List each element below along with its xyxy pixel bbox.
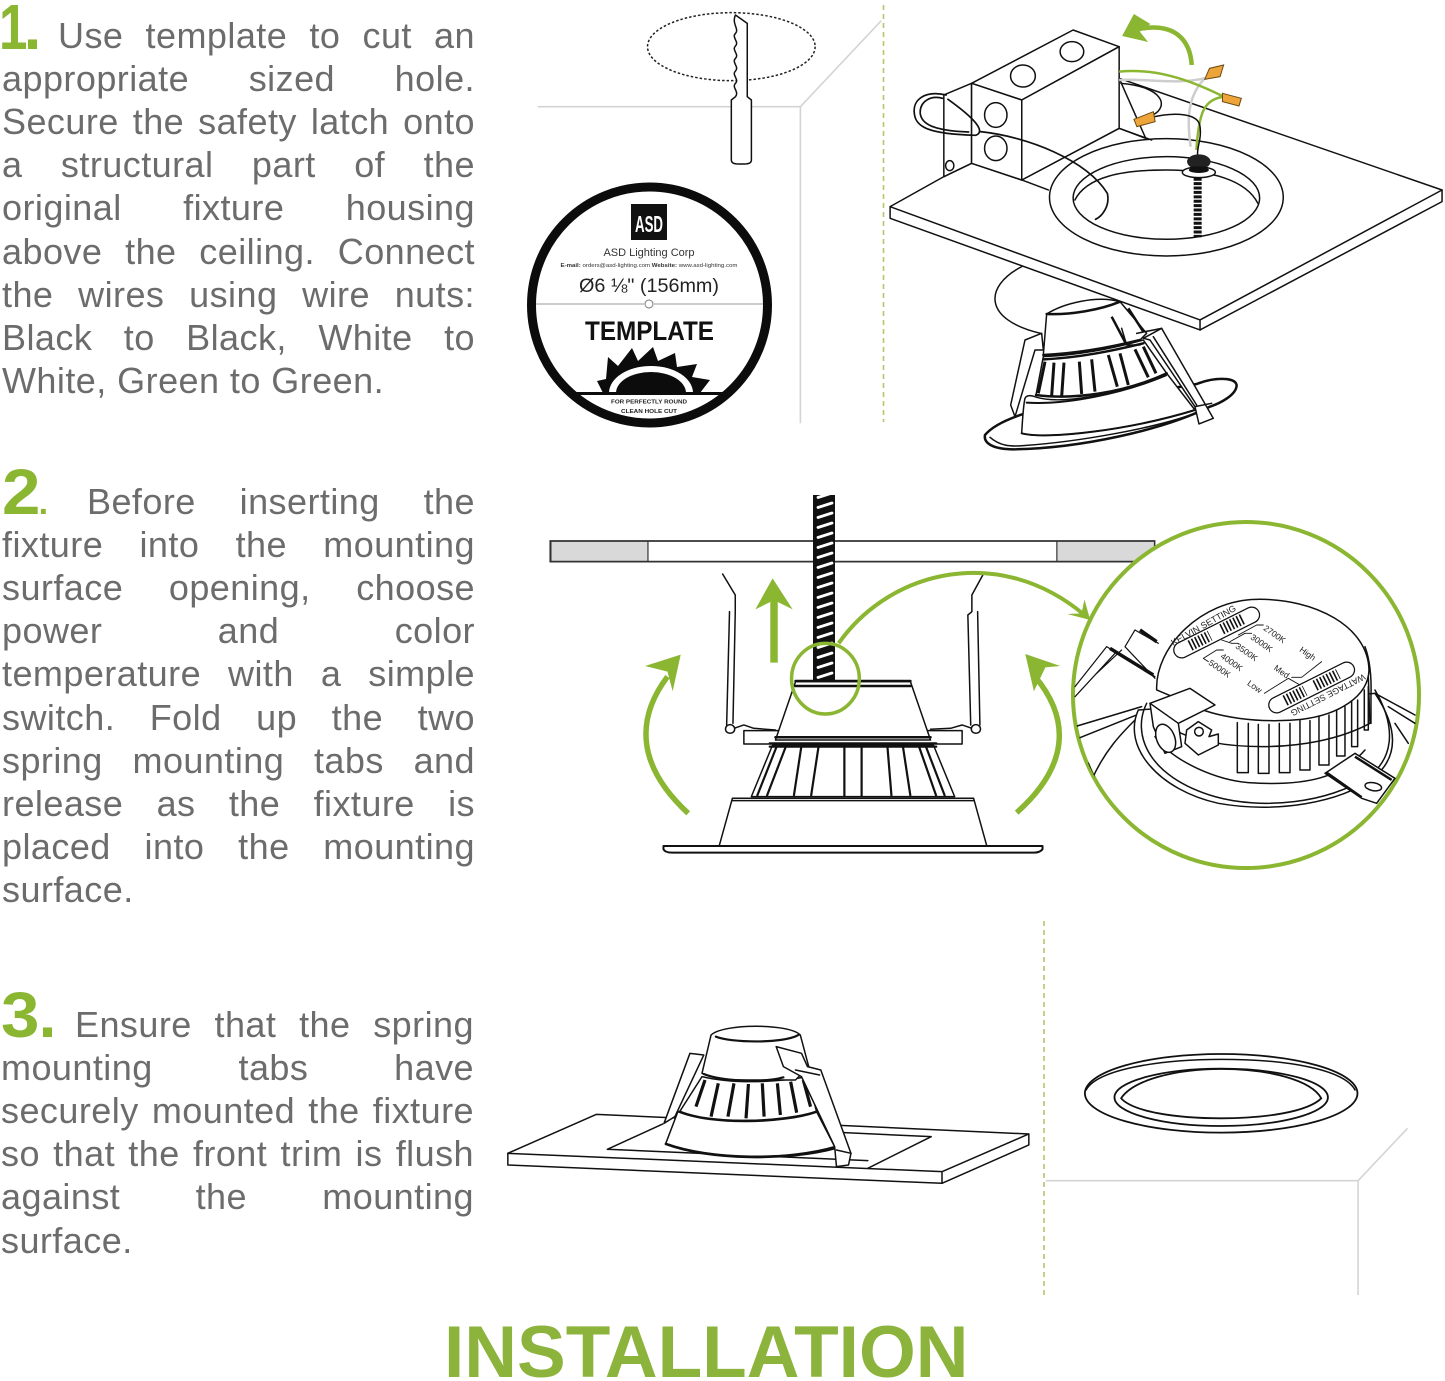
step 1 instructions: White, Green to Green.	[2, 360, 384, 401]
green curved arrow right	[1017, 654, 1060, 813]
step 2 instructions: fixture into the mounting	[2, 524, 475, 565]
wire nut left	[1134, 112, 1155, 127]
label: Med: Med	[1272, 663, 1292, 681]
wattage switch	[1277, 670, 1347, 705]
keyhole saw	[731, 15, 751, 164]
step 1: cutting hole with saw	[538, 13, 881, 423]
green up arrow	[755, 578, 793, 663]
connector hole	[1154, 724, 1176, 754]
detail fixture drawing	[1075, 599, 1415, 807]
step 1 instructions: a structural part of the	[2, 144, 475, 185]
step 1: fixture below board	[985, 299, 1237, 449]
mounting board	[890, 78, 1442, 330]
step 2 instructions: placed into the mounting	[2, 826, 475, 867]
spring arm right	[931, 574, 983, 729]
step 3 instructions: surface.	[1, 1220, 133, 1260]
step number 1	[0, 0, 41, 63]
step 3: fixture in board	[508, 1026, 1029, 1183]
connector block	[1150, 688, 1215, 753]
center line	[536, 303, 763, 305]
step 2 instructions	[2, 456, 475, 910]
kelvin switch	[1182, 615, 1252, 650]
upper cup	[775, 682, 931, 740]
threaded rod	[1194, 173, 1202, 237]
ceiling corner lines	[1046, 1128, 1408, 1295]
step 3: ceiling corner and finished trim	[1046, 1054, 1408, 1295]
step 1 instructions: Secure the safety latch onto	[2, 101, 475, 142]
step number 2: .	[39, 484, 48, 522]
spring clip	[1112, 308, 1143, 345]
step 2: fixture front view	[645, 573, 1090, 853]
trim inner line	[990, 414, 1193, 446]
step number 2: 2	[2, 456, 40, 528]
trim ring	[985, 379, 1237, 449]
step 2: zoomed detail circle	[1073, 522, 1419, 868]
lower cone	[1022, 373, 1195, 435]
rod nut	[1182, 154, 1215, 178]
label: 3500K: 3500K	[1234, 641, 1260, 663]
step 2 instructions: surface opening, choose	[2, 567, 475, 608]
dotted divider 1	[882, 5, 884, 422]
latch cable below	[995, 267, 1041, 333]
green zoom arc	[839, 573, 1090, 643]
detail circle background	[1073, 522, 1419, 868]
fins	[1168, 677, 1370, 773]
board	[508, 1114, 1029, 1183]
step 3 instructions	[1, 979, 474, 1260]
label: 3000K: 3000K	[1249, 632, 1275, 654]
wire: gray	[1119, 78, 1205, 147]
step 1 instructions: appropriate sized hole.	[2, 58, 475, 99]
step 2 instructions: spring mounting tabs and	[2, 740, 475, 781]
sticker ring	[532, 187, 768, 423]
ASD logo	[631, 204, 667, 240]
green highlight ellipse	[792, 643, 859, 714]
sticker caption line 2: CLEAN HOLE CUT	[621, 409, 677, 415]
step 3 instructions: mounting tabs have	[1, 1047, 474, 1088]
label: High: High	[1298, 644, 1318, 663]
ASD logo: ASD	[635, 211, 663, 237]
spring tab right	[1143, 328, 1213, 424]
template sticker	[532, 187, 768, 423]
switch leader lines	[1203, 625, 1322, 693]
flexible conduit	[813, 495, 835, 683]
step 2 instructions: surface.	[2, 869, 134, 910]
contact line: E-mail: orders@asd-lighting.com Website: www.asd-lighting.com	[560, 263, 738, 269]
connector nut	[1185, 722, 1218, 755]
fixture fins	[680, 1077, 817, 1121]
step 1 instructions: Use template to cut an	[58, 14, 475, 56]
spring arm left hinge	[725, 725, 735, 733]
trim	[663, 846, 1043, 853]
right tab	[1325, 753, 1395, 803]
step number 3	[1, 979, 56, 1051]
sticker caption line 1: FOR PERFECTLY ROUND	[611, 400, 687, 406]
step 2 instructions: power and color	[2, 610, 475, 651]
trim ring	[1085, 1054, 1357, 1133]
step 1 instructions: above the ceiling. Connect	[2, 230, 475, 272]
step 1 instructions: original fixture housing	[2, 187, 475, 228]
step 2 instructions: switch. Fold up the two	[2, 696, 475, 738]
fin base ring	[1155, 737, 1365, 783]
step 2 instructions: release as the fixture is	[2, 783, 475, 824]
wire nut right	[1222, 93, 1241, 106]
safety latch	[914, 94, 1108, 219]
bracket clips	[1075, 630, 1158, 697]
heat fins	[1036, 340, 1167, 397]
step 1 instructions	[0, 0, 475, 401]
fixture upper cup	[702, 1026, 809, 1080]
wire nut top	[1205, 65, 1224, 79]
upper cup	[1043, 299, 1147, 355]
spring arm left	[723, 574, 775, 730]
green curved arrow left	[645, 655, 688, 813]
step 2 instructions: temperature with a simple	[2, 653, 475, 694]
company name: ASD Lighting Corp	[603, 247, 695, 259]
inline illustrations	[507, 5, 1443, 1295]
center mark	[645, 300, 653, 308]
label: kelvin setting: KELVIN SETTING	[1169, 603, 1238, 648]
board left grey section	[551, 541, 648, 561]
board opening	[607, 1124, 931, 1168]
saw blade icon	[597, 347, 710, 392]
label: 5000K: 5000K	[1207, 657, 1233, 680]
control head top	[1157, 599, 1369, 721]
wire: green	[1119, 71, 1224, 150]
ceiling corner lines	[538, 21, 881, 423]
label: 2700K: 2700K	[1262, 623, 1288, 645]
junction box	[944, 30, 1152, 190]
lower cone	[719, 798, 987, 846]
step 1 instructions: the wires using wire nuts:	[2, 274, 475, 315]
step 3 instructions: Ensure that the spring	[75, 1004, 474, 1044]
outer trim rings	[1134, 693, 1393, 807]
board hole	[1049, 139, 1283, 256]
background trim curves	[1076, 692, 1416, 779]
step number 3: .	[39, 979, 56, 1051]
step 2: ceiling board section	[550, 541, 1155, 562]
fixture lower cone	[666, 1112, 835, 1156]
template label: TEMPLATE	[585, 316, 714, 346]
board right grey section	[1057, 541, 1155, 561]
step 1 instructions: Black to Black, White to	[2, 317, 475, 358]
step 2 instructions: Before inserting the	[87, 480, 475, 522]
step 3 instructions: securely mounted the fixture	[1, 1090, 474, 1131]
base line	[572, 392, 727, 395]
spring tab left	[1011, 333, 1043, 417]
wire: black	[1121, 83, 1200, 157]
step 3 instructions: so that the front trim is flush	[1, 1133, 474, 1174]
diameter: Ø6 ⅛" (156mm)	[579, 275, 719, 297]
step number 3: 3	[1, 979, 39, 1051]
board	[550, 541, 1155, 562]
dotted hole outline	[648, 13, 815, 81]
label: Low: Low	[1245, 678, 1265, 696]
step 1: junction box and wiring	[890, 14, 1442, 333]
step 3 instructions: against the mounting	[1, 1176, 474, 1217]
bracket	[744, 731, 962, 744]
heat fins	[751, 743, 955, 797]
spring tab right	[776, 1047, 851, 1167]
dotted divider 2	[1043, 921, 1045, 1296]
spring tab left	[664, 1053, 704, 1123]
label: 4000K: 4000K	[1219, 651, 1245, 673]
green removal arrow	[1122, 14, 1192, 65]
spring arm right hinge	[971, 725, 980, 733]
head double edge	[1365, 647, 1371, 723]
label: wattage setting: WATTAGE SETTING	[1289, 672, 1367, 718]
